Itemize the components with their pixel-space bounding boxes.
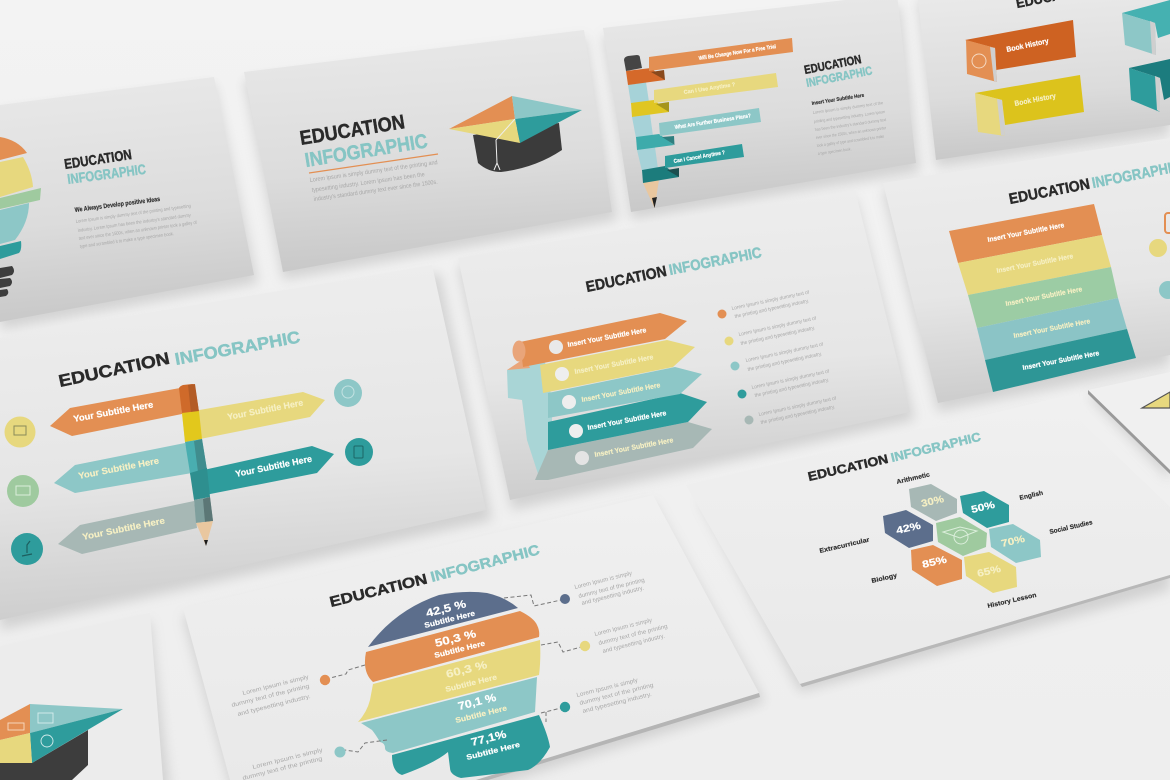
text block: has been the industry's standard dummy text: [814, 117, 887, 132]
title: [63, 146, 147, 187]
chart: head bands: Subtitle Here: [423, 609, 476, 630]
labels: subjects: Biology: [871, 572, 898, 585]
chart: stacked layers: Insert Your Subtitle Here: [1013, 317, 1091, 340]
text block: typesetting industry. Lorem Ipsum has been the: [311, 171, 426, 194]
text block: lower right note: and typesetting industry.: [582, 691, 653, 715]
chart: hexagons: [883, 484, 1041, 593]
title: EDUCATION: [57, 349, 171, 391]
title: INFOGRAPHIC: [173, 328, 302, 369]
chart: signpost arrows and pencil: Your Subtitle Here: [73, 399, 154, 424]
chart: head bands: 42,5 %: [425, 598, 468, 620]
text block: [811, 93, 887, 156]
chart: signpost arrows and pencil: [50, 384, 334, 554]
title: EDUCATION: [328, 571, 429, 611]
chart: hexagons: 50%: [970, 500, 996, 516]
chart: hexagons: 85%: [921, 555, 948, 571]
title: INFOGRAPHIC: [303, 130, 429, 172]
text block: lower right note: Lorem Ipsum is simply: [576, 677, 639, 699]
text block: lower left note: Lorem Ipsum is simply: [252, 747, 323, 771]
text block: left note: Lorem Ipsum is simply: [242, 674, 309, 697]
icon: yellow book: Book History: [1014, 91, 1057, 108]
text block: Lorem Ipsum is simply dummy text of the printing and typesetting: [75, 203, 191, 225]
icon: teacher figure: [507, 358, 552, 480]
text block: top right note: and typesetting industry.: [581, 585, 645, 607]
icon: ribbon pencil: Can I Use Anytime ?: [683, 82, 736, 96]
panel: light bulb slide: [0, 77, 258, 330]
icon: graduation cap: [0, 704, 123, 780]
chart: signpost arrows and pencil: Your Subtitle Here: [77, 456, 160, 481]
text block: type and scrambled it to make a type specimen book.: [79, 231, 174, 250]
text block: [74, 196, 198, 250]
icon: ribbon pencil: What Are Further Business Plans?: [674, 113, 752, 131]
panel: pencil ribbons slide: [603, 0, 920, 220]
labels: subjects: Social Studies: [1049, 519, 1094, 536]
title: INFOGRAPHIC: [889, 430, 982, 465]
chart: arrow stack: Insert Your Subtitle Here: [594, 435, 674, 459]
panel: book history slide: [918, 0, 1170, 168]
text block: lower right note: dummy text of the printing: [579, 682, 654, 707]
chart: signpost arrows and pencil: Your Subtitle Here: [81, 515, 166, 542]
title: [803, 52, 874, 90]
chart: stacked layers: Insert Your Subtitle Here: [987, 221, 1065, 244]
icon: dark teal circle: [345, 438, 373, 466]
legend: dots and notes: the printing and typesetting industry.: [754, 377, 830, 399]
text block: ever since the 1500s, when an unknown printer: [815, 125, 887, 140]
title: INFOGRAPHIC: [429, 542, 542, 586]
title: [298, 111, 429, 172]
text block: left note: dummy text of the printing: [231, 683, 310, 709]
text block: [309, 159, 439, 203]
text block: took a galley of type and scrambled it to make: [816, 134, 885, 148]
text block: printing and typesetting industry. Lorem Ipsum: [813, 109, 886, 124]
chart: hexagons: 70%: [1000, 534, 1026, 550]
title: [57, 328, 302, 391]
chart: stacked layers: Insert Your Subtitle Here: [996, 252, 1074, 275]
chart: head bands: 60,3 %: [445, 659, 489, 681]
panel: stacked layers slide: [883, 138, 1170, 412]
icon: light bulb: [0, 137, 41, 297]
chart: head bands: [358, 592, 550, 778]
icon: cap tip: [1142, 392, 1170, 408]
chart: signpost arrows and pencil: Your Subtitle Here: [234, 454, 313, 479]
chart: arrow stack: Insert Your Subtitle Here: [587, 408, 667, 432]
chart: stacked layers: [949, 204, 1136, 392]
text block: Insert Your Subtitle Here: [811, 93, 865, 107]
panel: head slide: [183, 495, 765, 780]
chart: arrow stack: Insert Your Subtitle Here: [567, 325, 647, 349]
title: EDUCATION: [803, 52, 863, 77]
icon: orange book: [965, 20, 1076, 82]
labels: subjects: [819, 471, 1094, 610]
title: EDUCATION: [807, 452, 890, 484]
chart: head bands: Subtitle Here: [433, 639, 486, 660]
chart: arrow stack: [512, 313, 712, 480]
panel: arrows with figure slide: [458, 190, 915, 510]
text block: middle right note: Lorem Ipsum is simply: [594, 617, 653, 638]
chart: head bands: Subtitle Here: [444, 672, 498, 694]
legend: dots and notes: the printing and typesetting industry.: [747, 351, 823, 373]
title: INFOGRAPHIC: [805, 63, 874, 90]
icon: yellow circle: [4, 416, 36, 448]
text block: Lorem Ipsum is simply dummy text of the: [812, 100, 884, 115]
text block: top right note: dummy text of the printing: [578, 577, 645, 600]
text block: a type specimen book.: [817, 146, 852, 156]
text block: industry. Lorem Ipsum has been the industry's standard dummy: [77, 212, 192, 234]
legend: dots and notes: [718, 290, 837, 426]
legend: dots and notes: the printing and typesetting industry.: [760, 404, 836, 426]
icon: ribbon pencil: Will Be Change Now For a Free Trial: [698, 44, 777, 62]
chart: head bands: Subtitle Here: [454, 703, 508, 725]
text block: industry's standard dummy text ever since the 1500s.: [313, 179, 438, 203]
chart: head bands: 77,1%: [470, 729, 508, 749]
title: INFOGRAPHIC: [668, 244, 763, 279]
chart: hexagons: 65%: [976, 564, 1002, 580]
text block: left note: and typesetting industry.: [237, 693, 312, 718]
text block: text ever since the 1500s, when an unknown printer took a galley of: [78, 220, 198, 242]
title: EDUCATION: [298, 111, 406, 150]
text block: Lorem Ipsum is simply dummy text of the printing and: [309, 159, 439, 184]
legend: dots and notes: the printing and typesetting industry.: [734, 298, 810, 320]
icon: teal circle: [11, 533, 43, 565]
title: EDUCATION: [584, 263, 668, 296]
icon: light teal circle: [334, 379, 362, 407]
legend: dots and notes: Lorem Ipsum is simply dummy text of: [745, 342, 824, 364]
chart: hexagons: 30%: [920, 494, 945, 510]
labels: subjects: History Lesson: [987, 592, 1037, 610]
icon: green circle: [7, 475, 39, 507]
legend: dots and notes: Lorem Ipsum is simply dummy text of: [758, 396, 837, 418]
labels: subjects: Arithmetic: [896, 471, 931, 486]
text block: middle right note: and typesetting industry.: [602, 633, 666, 655]
icon: yellow book: [975, 75, 1084, 136]
text block: lower right note: [576, 677, 654, 715]
icon: light teal book: [1122, 0, 1170, 55]
title: [1008, 158, 1170, 208]
panel: hexagon slide: [686, 398, 1170, 692]
title: [807, 430, 982, 484]
title: EDUCATION: [63, 146, 133, 172]
chart: head bands: 70,1 %: [457, 692, 498, 713]
icon: graduation cap: [449, 96, 582, 172]
icon: dark teal book: [1129, 59, 1170, 112]
chart: head bands: Subtitle Here: [465, 740, 521, 762]
labels: subjects: English: [1019, 490, 1044, 502]
connectors and dots: [320, 594, 590, 758]
legend: dots and notes: Lorem Ipsum is simply dummy text of: [751, 369, 830, 391]
chart: hexagons: 42%: [895, 521, 922, 537]
panel: bottom-left cap slide: [0, 613, 170, 780]
title: [584, 244, 763, 296]
text block: lower left note: [242, 747, 323, 780]
text block: We Always Develop positive Ideas: [74, 196, 161, 214]
title: INFOGRAPHIC: [66, 161, 147, 187]
legend: dots and notes: the printing and typesetting industry.: [740, 325, 816, 347]
icon: orange book: Book History: [1006, 36, 1050, 54]
chart: stacked layers: Insert Your Subtitle Here: [1005, 285, 1083, 308]
legend: dots and notes: Lorem Ipsum is simply dummy text of: [738, 316, 817, 338]
text block: middle right note: dummy text of the printing: [598, 623, 668, 647]
text block: top right note: [574, 570, 645, 607]
chart: stacked layers: Insert Your Subtitle Here: [1022, 349, 1100, 372]
text block: middle right note: [594, 617, 668, 655]
text block: left note: [231, 674, 312, 718]
text block: top right note: Lorem Ipsum is simply: [574, 570, 633, 591]
icon: ribbon pencil: Can I Cancel Anytime ?: [673, 150, 726, 165]
panel: right-edge slide: [1088, 372, 1170, 480]
panel: graduation cap slide: [244, 30, 618, 280]
chart: signpost arrows and pencil: Your Subtitle Here: [226, 397, 304, 422]
chart: arrow stack: Insert Your Subtitle Here: [581, 380, 661, 404]
panel: pencil signpost slide: [0, 265, 492, 630]
labels: subjects: Extracurricular: [819, 537, 871, 555]
title: EDUCATION: [1008, 176, 1091, 208]
legend: dots and notes: Lorem Ipsum is simply dummy text of: [731, 290, 810, 312]
title: [328, 542, 542, 611]
chart: arrow stack: Insert Your Subtitle Here: [574, 352, 654, 376]
icon: markers: [1149, 213, 1170, 299]
chart: head bands: 50,3 %: [434, 628, 478, 650]
icon: ribbon pencil: [624, 38, 793, 208]
